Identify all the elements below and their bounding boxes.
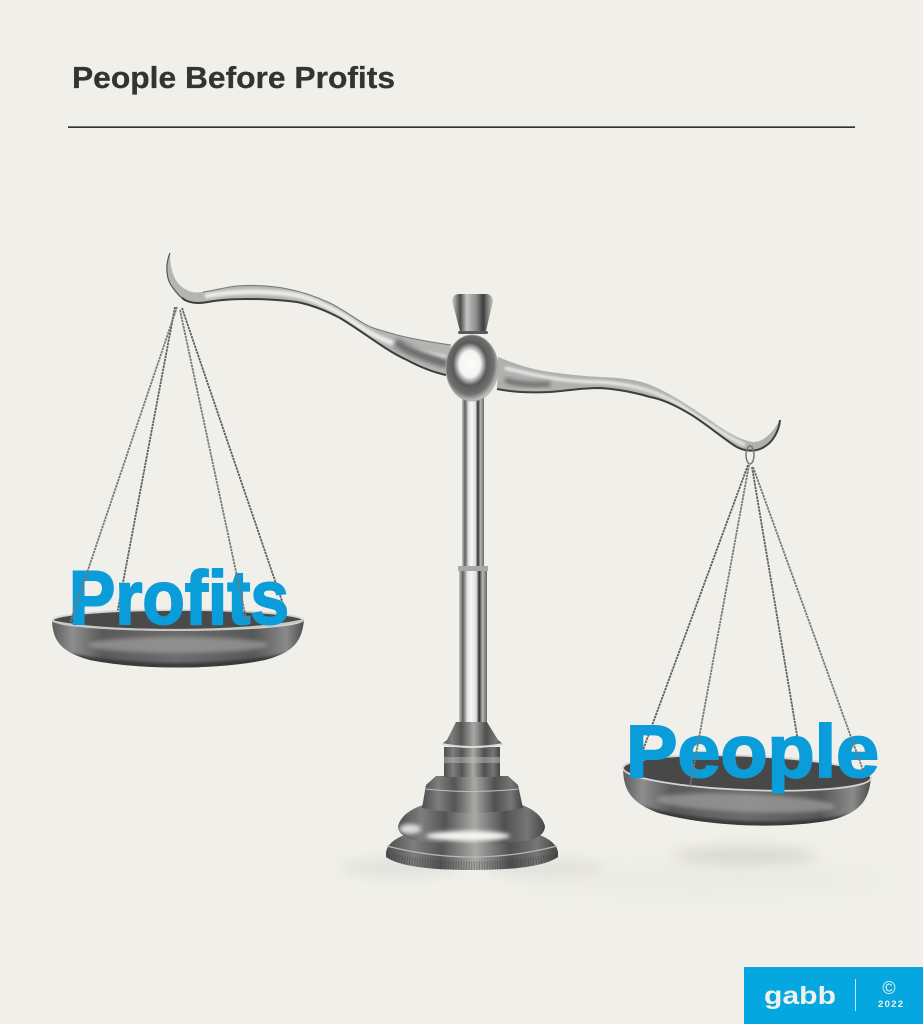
left beam with hook [167,253,451,375]
logo wordmark: gabb [764,982,836,1010]
base [386,722,558,870]
centre ball [446,335,498,401]
label: People: People [626,710,879,793]
finial [452,294,493,334]
copyright year: 2022 [878,999,903,1010]
ground shadows [340,848,890,888]
copyright symbol: © [882,978,896,998]
right pan chains, behind text [643,465,800,753]
right pan ring [746,446,754,464]
left pan chains, front of text [70,307,247,623]
left pan chains, behind text [115,307,285,625]
right pan chains, front of text [690,465,863,787]
left pan [52,610,304,675]
label: Profits: Profits [69,556,289,641]
pole [458,398,488,722]
logo badge [744,967,923,1024]
right pan [622,754,872,826]
scale balance [167,253,780,870]
right beam with hook [497,357,780,451]
title: People Before Profits [72,60,395,95]
